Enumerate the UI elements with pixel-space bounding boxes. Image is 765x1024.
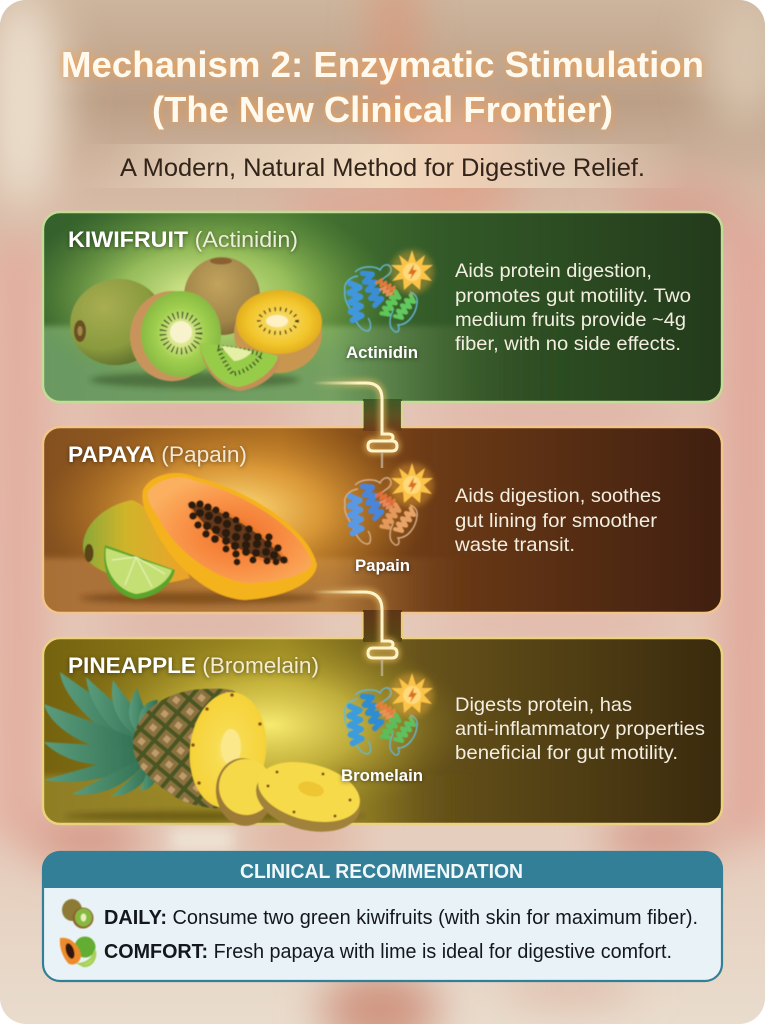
recommendation header xyxy=(43,852,722,888)
kiwi fruits illustration xyxy=(62,257,322,391)
pineapple description: Digests protein, has xyxy=(455,694,632,716)
kiwifruit heading: KIWIFRUIT (Actinidin) xyxy=(68,227,298,252)
subtitle band: A Modern, Natural Method for Digestive Relief. xyxy=(120,154,645,182)
kiwifruit description xyxy=(455,260,691,355)
panel: papaya xyxy=(42,426,724,614)
papaya description: Aids digestion, soothes xyxy=(455,485,661,507)
actinidin label: Actinidin xyxy=(346,343,418,362)
recommendation header: CLINICAL RECOMMENDATION xyxy=(240,861,523,883)
kiwifruit description: fiber, with no side effects. xyxy=(455,333,681,355)
pineapple description: anti-inflammatory properties xyxy=(455,718,705,740)
comfort recommendation: COMFORT: Fresh papaya with lime is ideal for digestive comfort. xyxy=(104,941,672,963)
papaya description xyxy=(455,488,660,551)
icon: actinidin protein xyxy=(345,250,434,332)
kiwifruit description: medium fruits provide ~4g xyxy=(455,309,686,331)
papaya and lime illustration xyxy=(80,473,320,604)
pineapple description xyxy=(455,694,705,764)
bromelain label: Bromelain xyxy=(341,766,423,785)
papain label: Papain xyxy=(355,556,410,575)
papaya description: gut lining for smoother xyxy=(455,510,658,532)
pineapple description: beneficial for gut motility. xyxy=(455,742,678,764)
papaya description: waste transit. xyxy=(454,534,575,556)
icon: kiwi xyxy=(62,899,94,928)
panel: clinical recommendation xyxy=(43,852,722,981)
icon: papaya and lime xyxy=(60,936,96,966)
icon: bromelain protein xyxy=(345,673,434,755)
connector: kiwifruit to papaya xyxy=(312,383,402,468)
title: Mechanism 2: Enzymatic Stimulation xyxy=(61,44,704,85)
panel: pineapple xyxy=(42,636,724,832)
title: (The New Clinical Frontier) xyxy=(152,89,613,130)
icon: papain protein xyxy=(345,463,434,545)
subtitle band xyxy=(114,144,653,188)
panel: kiwifruit xyxy=(42,210,724,404)
kiwifruit description: promotes gut motility. Two xyxy=(455,285,691,307)
pineapple illustration xyxy=(44,672,367,842)
pineapple heading: PINEAPPLE (Bromelain) xyxy=(68,653,319,678)
kiwifruit description: Aids protein digestion, xyxy=(455,260,652,282)
papaya heading: PAPAYA (Papain) xyxy=(68,442,247,467)
connector: papaya to pineapple xyxy=(312,592,402,676)
title xyxy=(61,44,704,130)
daily recommendation: DAILY: Consume two green kiwifruits (with skin for maximum fiber). xyxy=(104,907,698,929)
